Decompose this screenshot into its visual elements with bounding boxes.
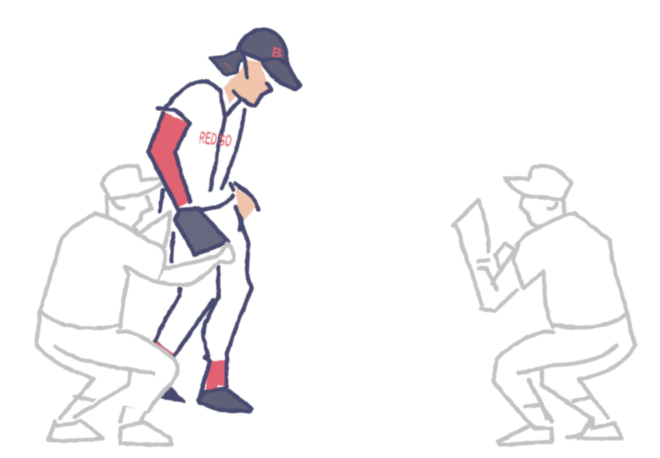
cap: [505, 166, 572, 200]
red sleeve: [149, 111, 189, 208]
cap brim: [262, 58, 300, 89]
red sock left: [155, 342, 173, 357]
chest protector: [453, 200, 517, 311]
left catcher: body behind pitcher: [37, 166, 187, 445]
left catcher arm: [120, 243, 234, 327]
left catcher: arm and thigh in front of pitcher: [55, 243, 234, 417]
pants outlines: [155, 190, 252, 357]
left catcher thigh: [55, 331, 178, 417]
head: [520, 196, 565, 227]
legs: [493, 331, 635, 438]
right shoe: [198, 388, 252, 412]
right catcher: [453, 166, 635, 445]
hand: [237, 188, 258, 220]
pitcher in Red Sox uniform: [137, 29, 300, 412]
sock outline: [198, 353, 227, 400]
sleeve outline: [148, 108, 190, 210]
team lettering: RED SO: [198, 128, 233, 151]
hair: [210, 49, 245, 75]
hair highlight: [225, 63, 232, 70]
face: [223, 60, 273, 105]
red sock right: [205, 360, 227, 392]
glove: [175, 208, 228, 255]
lower back leg: [137, 373, 145, 387]
hand outline: [230, 183, 258, 230]
cap logo: B: [270, 44, 283, 62]
pitcher jersey and pants fill: [155, 81, 252, 357]
cap: [238, 29, 287, 63]
left shoe: [158, 387, 185, 402]
shoes: [498, 418, 622, 445]
hands: [478, 243, 515, 290]
jersey outlines: [165, 81, 245, 209]
torso: [513, 213, 635, 345]
face outlines: [233, 62, 272, 106]
